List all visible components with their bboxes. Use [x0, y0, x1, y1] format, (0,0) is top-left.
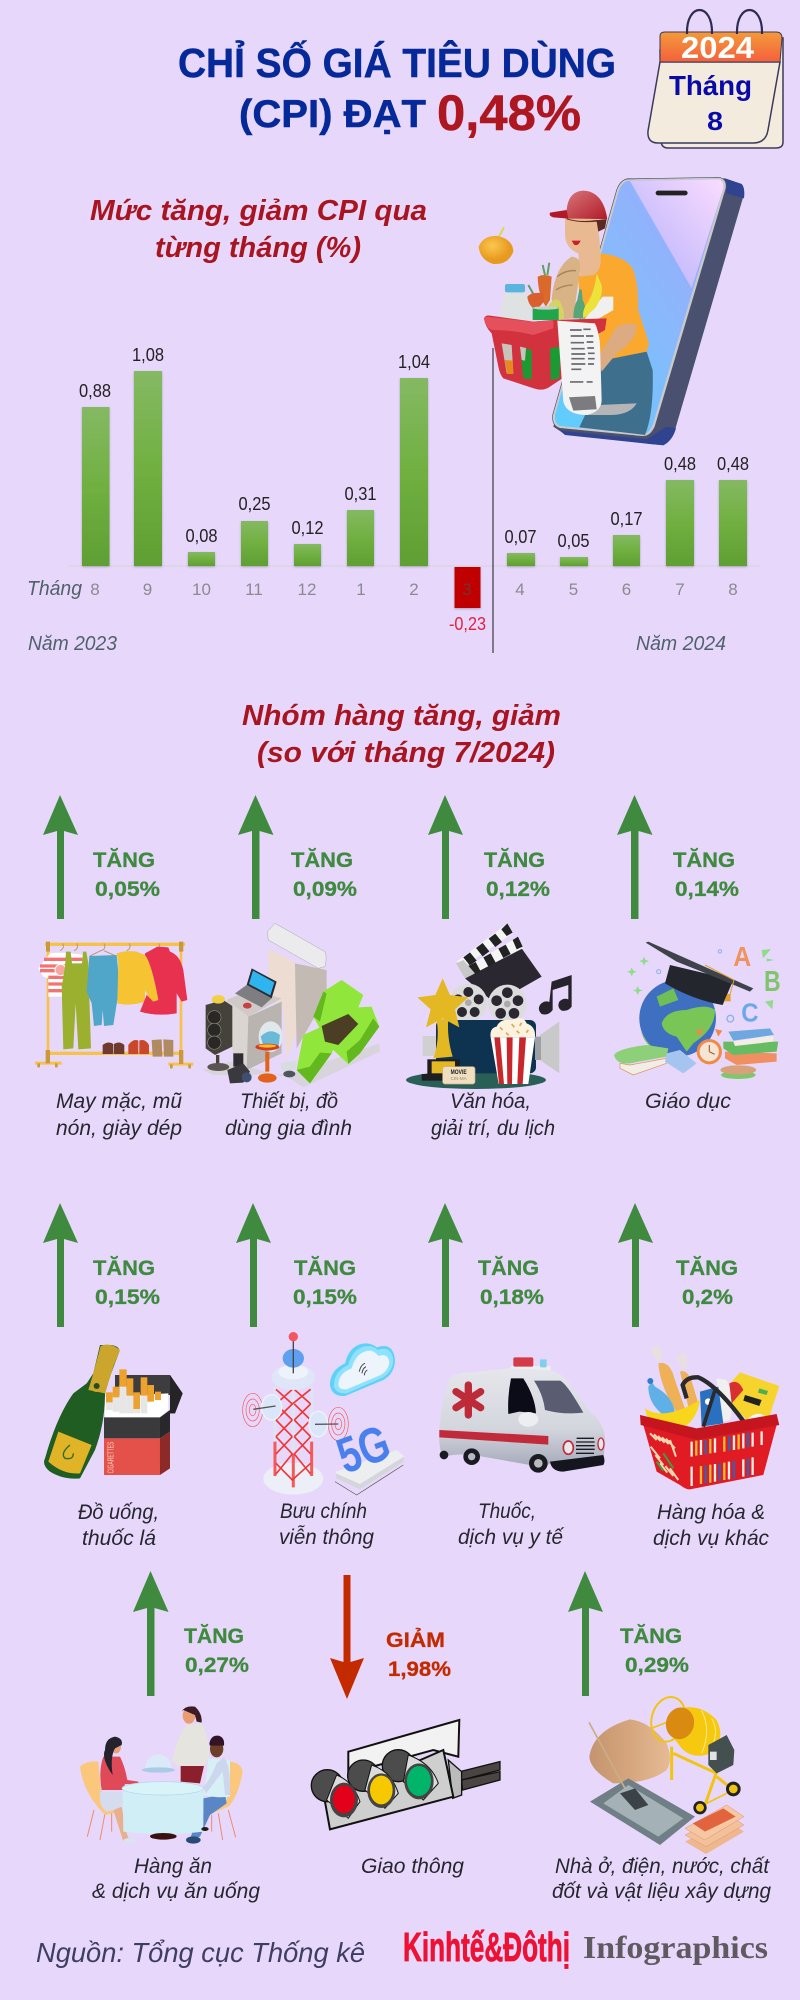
item: other goods and services [618, 1203, 779, 1550]
icon: cinema: MOVIE [451, 1070, 467, 1076]
arrow up [428, 1203, 463, 1327]
month axis labels: 5 [569, 580, 578, 599]
icon: globe and books: B [764, 966, 781, 998]
caption: dùng gia đình [225, 1117, 352, 1140]
caption: Nhà ở, điện, nước, chất [555, 1855, 770, 1878]
icon: telecom tower, cloud, 5G: 5G [330, 1414, 397, 1484]
arrow up [133, 1571, 168, 1696]
value labels: 0,12 [292, 518, 324, 538]
icon: bottle and cigarettes [44, 1345, 183, 1479]
icon: cinema: CIN-MA [451, 1076, 468, 1081]
caption: thuốc lá [82, 1527, 156, 1550]
value labels: 0,48 [717, 454, 749, 474]
arrow up [618, 1203, 653, 1327]
icon: bottle and cigarettes: CIGARETTES [106, 1442, 115, 1473]
caption: Bưu chính [280, 1500, 367, 1523]
icon: globe and books: C [741, 997, 759, 1027]
month axis labels: 8 [90, 580, 100, 599]
caption: Thuốc, [478, 1500, 536, 1523]
value labels: 0,17 [610, 509, 642, 529]
item: post and telecom [236, 1203, 404, 1549]
value: TĂNG [184, 1625, 244, 1648]
arrow up [428, 795, 463, 919]
value labels: 1,04 [398, 352, 430, 372]
value: TĂNG [676, 1257, 738, 1280]
caption [92, 1855, 260, 1903]
value: 0,09% [293, 878, 357, 901]
caption: dịch vụ khác [653, 1527, 769, 1550]
icon: orange [479, 227, 513, 264]
heading: monthly CPI: từng tháng (%) [155, 232, 361, 264]
value [93, 849, 160, 901]
title [178, 40, 616, 141]
heading: product groups: (so với tháng 7/2024) [257, 737, 555, 769]
arrow up [238, 795, 274, 919]
arrow down [330, 1575, 364, 1699]
value: 0,15% [293, 1286, 357, 1309]
item: transport [311, 1575, 500, 1878]
title: CHỈ SỐ GIÁ TIÊU DÙNG [178, 40, 616, 86]
year labels: Năm 2023 [28, 633, 117, 655]
month axis labels: 4 [515, 580, 525, 599]
month axis labels: 3 [462, 580, 472, 599]
source note: Nguồn: Tổng cục Thống kê [36, 1937, 365, 1968]
icon: cement mixer and materials [589, 1693, 744, 1854]
value [386, 1629, 451, 1681]
icon: calendar [648, 10, 783, 148]
heading: product groups [242, 700, 561, 769]
value [93, 1257, 160, 1309]
item: culture and entertainment [406, 795, 572, 1140]
value: 0,29% [625, 1654, 689, 1677]
caption: Giáo dục [645, 1090, 732, 1113]
arrow up [43, 795, 78, 919]
caption: Đồ uống, [78, 1501, 159, 1524]
shopper [550, 191, 653, 435]
value: TĂNG [484, 849, 545, 872]
value: 0,15% [95, 1286, 160, 1309]
arrow up [617, 795, 652, 919]
month axis labels: Tháng [27, 578, 82, 600]
caption [458, 1500, 564, 1549]
value: 0,14% [675, 878, 739, 901]
item: restaurants [80, 1571, 260, 1903]
groceries [500, 257, 613, 327]
month axis labels: 9 [143, 580, 152, 599]
item: medicine and health [428, 1203, 605, 1549]
year labels [28, 633, 726, 655]
arrow up [236, 1203, 271, 1327]
caption: đốt và vật liệu xây dựng [552, 1880, 771, 1903]
caption: Giao thông [361, 1855, 464, 1878]
arrow up [43, 1203, 78, 1327]
value: TĂNG [673, 849, 735, 872]
heading: product groups: Nhóm hàng tăng, giảm [242, 700, 561, 732]
value labels [79, 345, 749, 634]
value [484, 849, 550, 901]
month axis labels: 8 [728, 580, 738, 599]
icon: telecom tower, cloud, 5G [243, 1332, 404, 1495]
value: 0,05% [95, 878, 160, 901]
month axis labels: 10 [192, 580, 211, 599]
value labels: 0,07 [504, 527, 536, 547]
value [620, 1625, 689, 1677]
item: household appliances [202, 795, 380, 1140]
value: 0,18% [480, 1286, 544, 1309]
caption: dịch vụ y tế [458, 1526, 564, 1549]
value [676, 1257, 738, 1309]
value: TĂNG [294, 1257, 356, 1280]
value [291, 849, 357, 901]
item: education [614, 795, 781, 1113]
value labels: 0,25 [238, 494, 270, 514]
caption: Văn hóa, [450, 1090, 531, 1113]
value labels: -0,23 [449, 614, 486, 634]
title: 0,48% [437, 85, 581, 141]
basket [484, 316, 607, 390]
icon: calendar: Tháng [669, 70, 752, 101]
logo: Infographics [583, 1929, 768, 1965]
value [293, 1257, 357, 1309]
value: TĂNG [620, 1625, 682, 1648]
negative bar [454, 567, 480, 608]
bar chart: monthly CPI [27, 345, 760, 655]
heading: monthly CPI [90, 195, 427, 264]
value: 0,12% [486, 878, 550, 901]
value: 1,98% [388, 1658, 451, 1681]
year labels: Năm 2024 [636, 633, 726, 655]
caption [225, 1090, 352, 1140]
illustration: orange, phone, shopper and basket [479, 177, 744, 445]
caption [653, 1501, 769, 1550]
value labels: 1,08 [132, 345, 164, 365]
caption: Hàng hóa & [657, 1501, 765, 1524]
caption [552, 1855, 771, 1903]
item: clothing [35, 795, 193, 1140]
item: drinks and tobacco [43, 1203, 183, 1550]
caption: & dịch vụ ăn uống [92, 1880, 260, 1903]
value: 0,2% [682, 1286, 733, 1309]
title: (CPI) ĐẠT [239, 93, 426, 136]
value: TĂNG [291, 849, 353, 872]
month axis labels: 2 [409, 580, 419, 599]
caption: May mặc, mũ [56, 1090, 182, 1113]
bars [82, 371, 747, 566]
icon: traffic light [311, 1720, 500, 1829]
icon: globe and books [614, 941, 781, 1079]
icon: appliances [202, 923, 380, 1087]
value [478, 1257, 544, 1309]
value: TĂNG [93, 1257, 155, 1280]
value labels: 0,88 [79, 381, 111, 401]
value: TĂNG [478, 1257, 539, 1280]
month axis labels: 12 [298, 580, 316, 599]
icon: globe and books: A [733, 941, 752, 972]
value [673, 849, 739, 901]
month axis labels: 1 [356, 580, 366, 599]
caption: giải trí, du lịch [431, 1117, 555, 1140]
icon: calendar: 8 [707, 106, 723, 136]
item: housing and construction materials [552, 1571, 771, 1903]
value labels: 0,48 [664, 454, 696, 474]
month axis labels [27, 578, 738, 600]
value [184, 1625, 249, 1677]
value labels: 0,08 [186, 526, 218, 546]
arrow up [568, 1571, 603, 1696]
icon: calendar: 2024 [681, 30, 755, 65]
caption [56, 1090, 182, 1140]
month axis labels: 7 [675, 580, 685, 599]
month axis labels: 11 [245, 580, 263, 599]
caption [279, 1500, 374, 1549]
caption [78, 1501, 159, 1550]
value: TĂNG [93, 849, 155, 872]
value labels: 0,05 [558, 531, 590, 551]
icon: cinema [406, 923, 572, 1089]
month axis labels: 6 [622, 580, 631, 599]
phone [553, 177, 744, 445]
value labels: 0,31 [344, 484, 376, 504]
icon: ambulance [439, 1357, 605, 1473]
logo: Kinhtế&Đôthị [403, 1924, 570, 1970]
receipt [557, 321, 637, 415]
caption: viễn thông [279, 1526, 374, 1549]
icon: clothes rack [35, 942, 193, 1068]
icon: shopping basket [640, 1345, 779, 1489]
caption: Thiết bị, đồ [240, 1090, 338, 1113]
caption [431, 1090, 555, 1140]
value: 0,27% [185, 1654, 249, 1677]
heading: monthly CPI: Mức tăng, giảm CPI qua [90, 195, 427, 227]
icon: restaurant scene [80, 1706, 243, 1844]
value: GIẢM [386, 1629, 445, 1652]
caption: Hàng ăn [134, 1855, 212, 1878]
caption: nón, giày dép [56, 1117, 182, 1140]
